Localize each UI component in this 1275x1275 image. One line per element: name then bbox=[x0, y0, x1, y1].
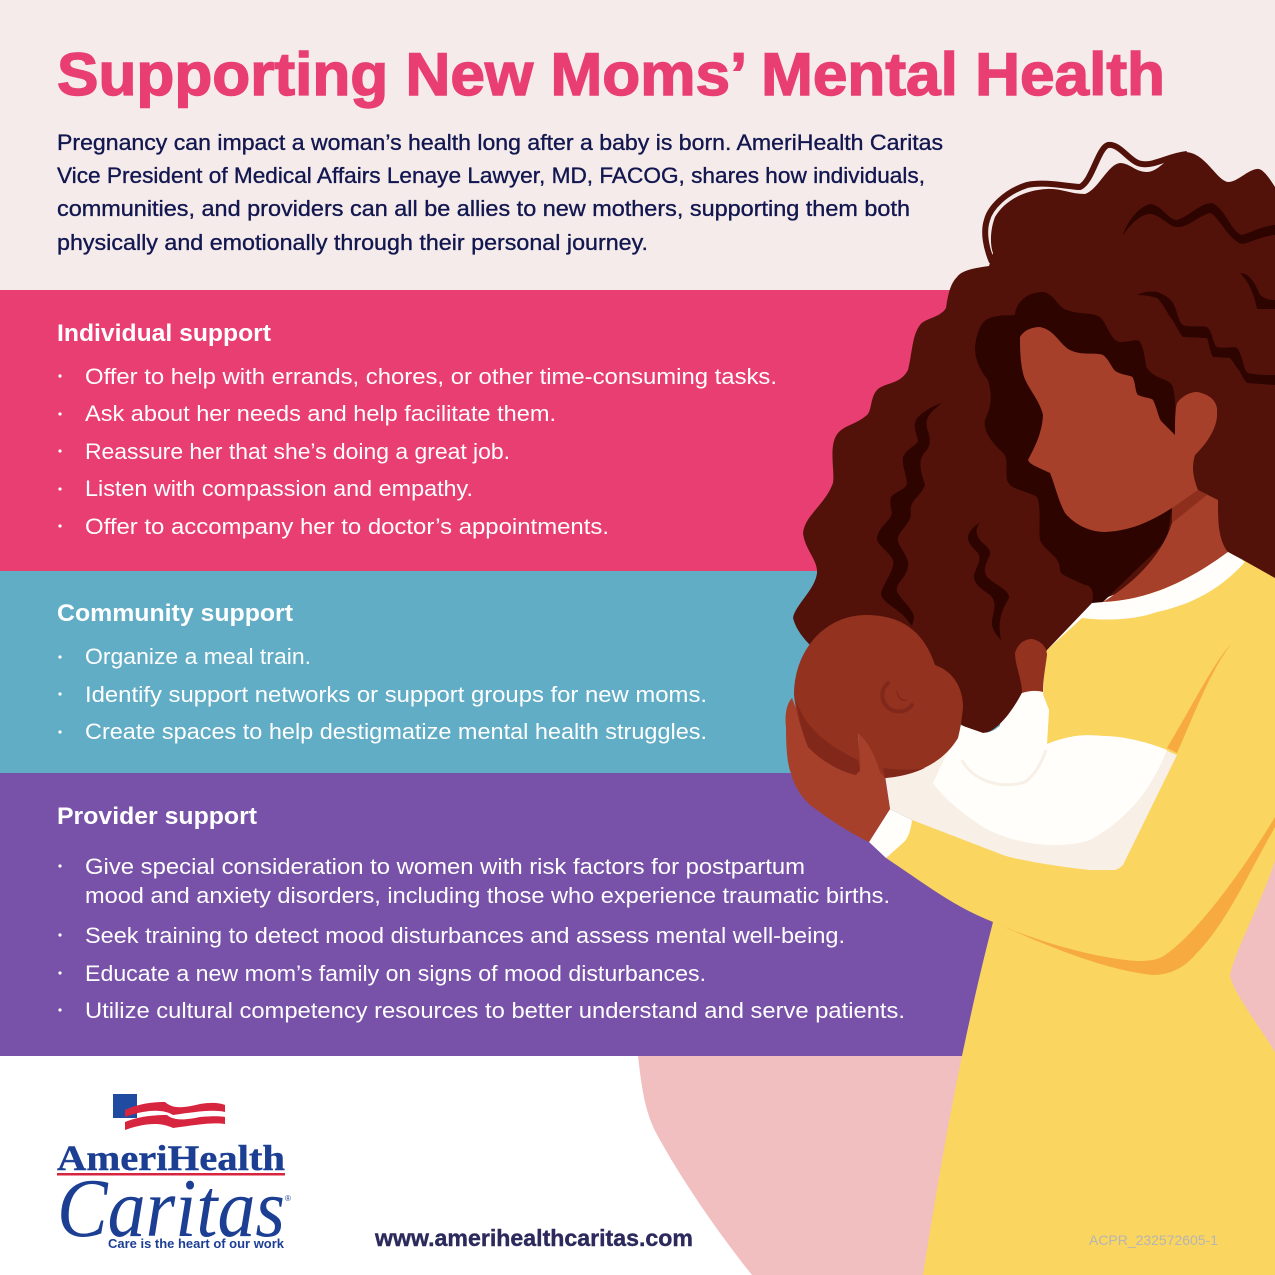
list: individual support bbox=[58, 364, 777, 539]
logo Caritas: Caritas bbox=[57, 1162, 285, 1255]
intro text: Pregnancy can impact a woman’s health long after a baby is born. AmeriHealth Caritas bbox=[57, 130, 943, 155]
section: individual support bbox=[57, 320, 777, 539]
list: individual support: Reassure her that she’s doing a great job. bbox=[85, 439, 510, 464]
list: individual support: Ask about her needs and help facilitate them. bbox=[85, 401, 556, 426]
baby wrap shadow bbox=[885, 692, 1177, 870]
baby ear bbox=[882, 683, 912, 712]
illustration: mother holding baby bbox=[786, 145, 1275, 1275]
hair shadow bbox=[975, 292, 1176, 603]
intro text: physically and emotionally through their personal journey. bbox=[57, 230, 648, 255]
neck bbox=[1103, 490, 1228, 602]
panel: community support background bbox=[0, 571, 1000, 773]
dress shadow: arm bbox=[1000, 817, 1275, 975]
logo registered mark: ® bbox=[285, 1194, 291, 1203]
panel: provider support background bbox=[0, 773, 1050, 1056]
header panel bbox=[0, 0, 1275, 290]
panel: individual support background bbox=[0, 290, 1000, 571]
section: provider support bbox=[57, 803, 905, 1023]
document code: ACPR_232572605-1 bbox=[1089, 1232, 1218, 1248]
baby chin shadow bbox=[883, 768, 925, 778]
baby head bbox=[794, 615, 963, 778]
collar bbox=[1082, 552, 1245, 620]
logo: AmeriHealth Caritas bbox=[57, 1094, 291, 1255]
mother's hand bbox=[786, 698, 890, 842]
baby arm fold line bbox=[962, 750, 1046, 785]
decorative pink blob bbox=[638, 860, 1275, 1275]
intro text: communities, and providers can all be allies to new mothers, supporting them both bbox=[57, 196, 910, 221]
neck shadow bbox=[1172, 488, 1207, 523]
list: provider support bbox=[58, 854, 905, 1023]
list: community support: Create spaces to help destigmatize mental health struggles. bbox=[85, 719, 707, 744]
baby hand bbox=[1015, 639, 1047, 693]
logo flag bbox=[113, 1094, 225, 1130]
section: community support bbox=[57, 600, 707, 744]
hair bbox=[793, 152, 1275, 733]
list: community support bbox=[58, 644, 707, 744]
list: provider support: Utilize cultural competency resources to better understand and serve patients. bbox=[85, 998, 905, 1023]
title: Supporting New Moms’ Mental Health bbox=[57, 41, 1165, 108]
website: www.amerihealthcaritas.com bbox=[374, 1225, 693, 1251]
body: yellow dress bbox=[886, 560, 1275, 1275]
baby head shadow bbox=[796, 700, 860, 775]
heading: individual support: Individual support bbox=[57, 320, 271, 347]
list: provider support: Give special consideration to women with risk factors for postpartum bbox=[85, 854, 805, 879]
logo tagline: Care is the heart of our work bbox=[108, 1236, 285, 1251]
dress shadow: shoulder bbox=[1167, 643, 1232, 753]
face bbox=[1020, 327, 1217, 532]
list: individual support: Listen with compassion and empathy. bbox=[85, 476, 473, 501]
list: provider support: mood and anxiety disorders, including those who experience traumatic births. bbox=[85, 883, 890, 908]
list: individual support: Offer to accompany her to doctor’s appointments. bbox=[85, 514, 609, 539]
logo red rule bbox=[57, 1173, 285, 1176]
heading: provider support: Provider support bbox=[57, 803, 257, 830]
intro text bbox=[57, 130, 943, 255]
logo wordmark: AmeriHealth bbox=[57, 1138, 285, 1178]
baby wrap highlight bbox=[933, 692, 1167, 845]
list: provider support: Seek training to detect mood disturbances and assess mental well-being. bbox=[85, 923, 845, 948]
heading: community support: Community support bbox=[57, 600, 293, 627]
list: community support: Organize a meal train. bbox=[85, 644, 311, 669]
hair strand on top bbox=[985, 145, 1187, 262]
hair curls bbox=[877, 203, 1275, 640]
list: individual support: Offer to help with errands, chores, or other time-consuming tasks. bbox=[85, 364, 777, 389]
intro text: Vice President of Medical Affairs Lenaye Lawyer, MD, FACOG, shares how individuals, bbox=[57, 163, 925, 188]
cuff bbox=[869, 809, 912, 858]
list: provider support: Educate a new mom’s family on signs of mood disturbances. bbox=[85, 961, 706, 986]
list: community support: Identify support networks or support groups for new moms. bbox=[85, 682, 707, 707]
